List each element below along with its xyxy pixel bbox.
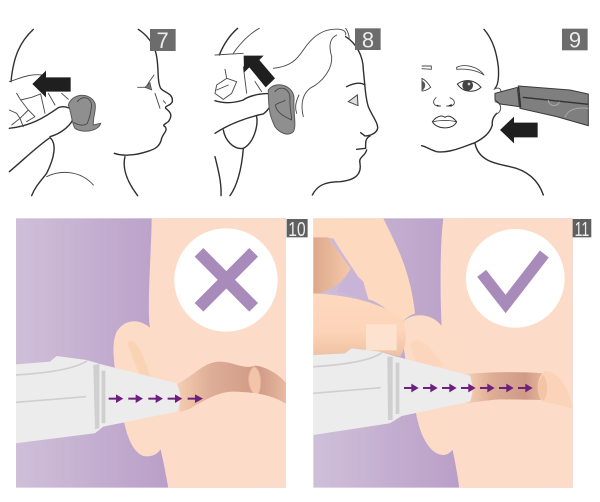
- eardrum: [249, 367, 261, 396]
- step number 11: 11: [575, 218, 589, 241]
- step number 9: [562, 27, 588, 52]
- illustration: step 8, pulling an adult's ear up and back: [215, 27, 381, 196]
- hair and head outline: [219, 28, 349, 117]
- hand and neck: [215, 53, 273, 196]
- panel: step 10, incorrect insertion: [16, 218, 308, 488]
- insertion arrows: [109, 394, 203, 403]
- step number 8: 8: [362, 27, 374, 52]
- fingers pulling ear: [313, 218, 415, 357]
- baby face front view: [422, 29, 543, 195]
- panel: step 11, correct insertion: [313, 218, 591, 488]
- adult face profile: [312, 37, 378, 195]
- step number 7: [150, 28, 176, 53]
- face skin: [441, 218, 573, 488]
- thermometer probe: [16, 356, 180, 443]
- thermometer probe: [313, 348, 472, 435]
- arrow pointing up and back: [244, 56, 275, 87]
- baby head and neck outline: [9, 29, 93, 196]
- step number 10: 10: [288, 218, 306, 241]
- outer ear: [113, 321, 167, 456]
- outer ear: [403, 315, 460, 455]
- purple background: [16, 218, 286, 488]
- illustration: step 7, pulling a baby's ear backward: [9, 28, 176, 196]
- illustration: step 9, thermometer in baby's ear: [422, 27, 588, 195]
- lower face: [448, 400, 573, 488]
- step number 8: [355, 27, 381, 52]
- step number 9: 9: [569, 27, 581, 52]
- arrow pointing toward ear: [500, 117, 538, 143]
- check mark in white circle: [466, 229, 565, 328]
- ear canal: [467, 372, 545, 403]
- cross mark in white circle: [174, 228, 278, 332]
- thermometer: [495, 86, 588, 126]
- ear canal: [177, 362, 286, 413]
- lower face: [157, 392, 286, 488]
- face skin: [149, 218, 286, 488]
- face profile: [114, 29, 172, 196]
- step number 7: 7: [157, 28, 169, 53]
- gray highlighted ear: [268, 85, 295, 134]
- arrow pointing backward: [32, 71, 71, 97]
- eardrum: [538, 371, 573, 408]
- purple background: [313, 218, 573, 488]
- insertion arrows: [404, 384, 533, 392]
- hand holding ear: [9, 75, 74, 137]
- gray highlighted ear: [68, 95, 101, 131]
